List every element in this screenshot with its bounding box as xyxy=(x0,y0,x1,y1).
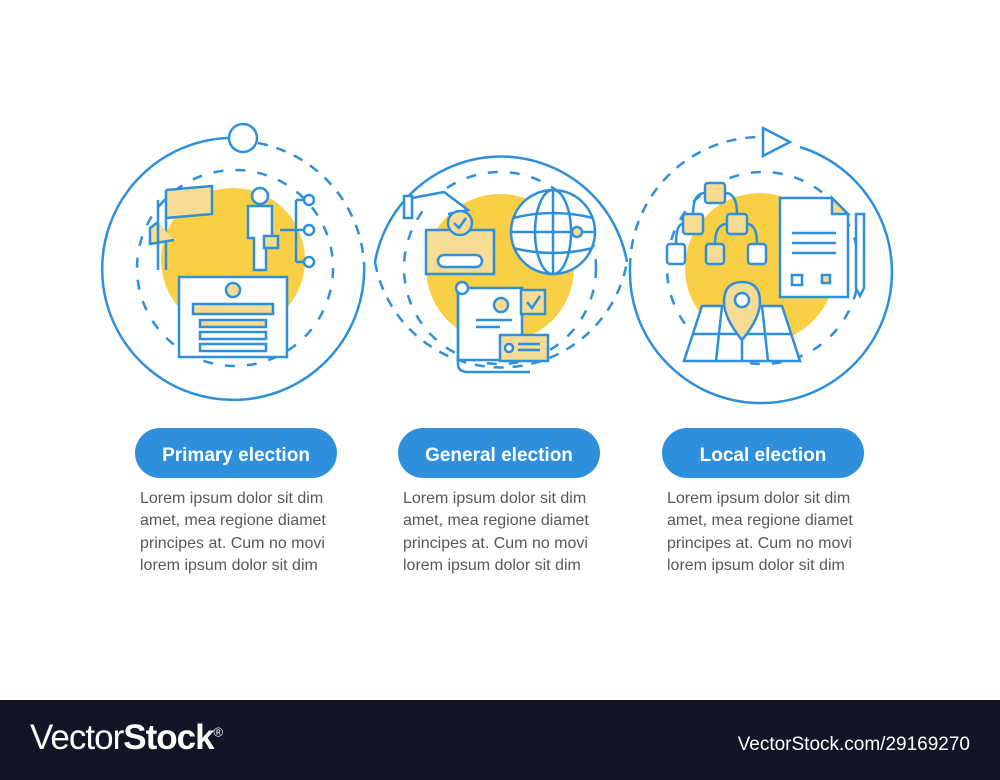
pill: primary election: Primary election xyxy=(162,445,310,466)
pill: primary election xyxy=(135,428,337,478)
icon: ballot form xyxy=(179,277,287,357)
text: local: Lorem ipsum dolor sit dim amet, mea regione diamet principes at. Cum no movi lorem ipsum dolor sit dim xyxy=(667,490,853,574)
icon: flags xyxy=(150,186,212,270)
footer bar xyxy=(0,700,1000,780)
circle 2: general election xyxy=(375,157,627,372)
icon: map pin grid xyxy=(684,282,800,361)
icon: document scroll xyxy=(456,282,548,372)
pill: general election xyxy=(398,428,600,478)
pill: local election xyxy=(662,428,864,478)
icon: play arrow xyxy=(763,128,790,156)
pill: general election: General election xyxy=(425,445,573,466)
circle 1: primary election xyxy=(102,124,364,400)
icon: person xyxy=(248,188,278,270)
logo: VectorStock® xyxy=(30,718,222,757)
url: VectorStock.com/29169270 xyxy=(738,734,970,755)
icon: org chart xyxy=(667,183,766,264)
pill: local election: Local election xyxy=(700,445,826,466)
icon: ballot box with hand xyxy=(404,192,494,274)
icon: network xyxy=(280,195,314,267)
icon: globe xyxy=(511,190,595,274)
illustration circles xyxy=(100,122,894,404)
text: primary: Lorem ipsum dolor sit dim amet, mea regione diamet principes at. Cum no movi lorem ipsum dolor sit dim xyxy=(140,490,326,574)
text: general: Lorem ipsum dolor sit dim amet, mea regione diamet principes at. Cum no movi lorem ipsum dolor sit dim xyxy=(403,490,589,574)
icon: document with pen xyxy=(780,198,864,297)
circle 3: local election xyxy=(630,128,892,403)
